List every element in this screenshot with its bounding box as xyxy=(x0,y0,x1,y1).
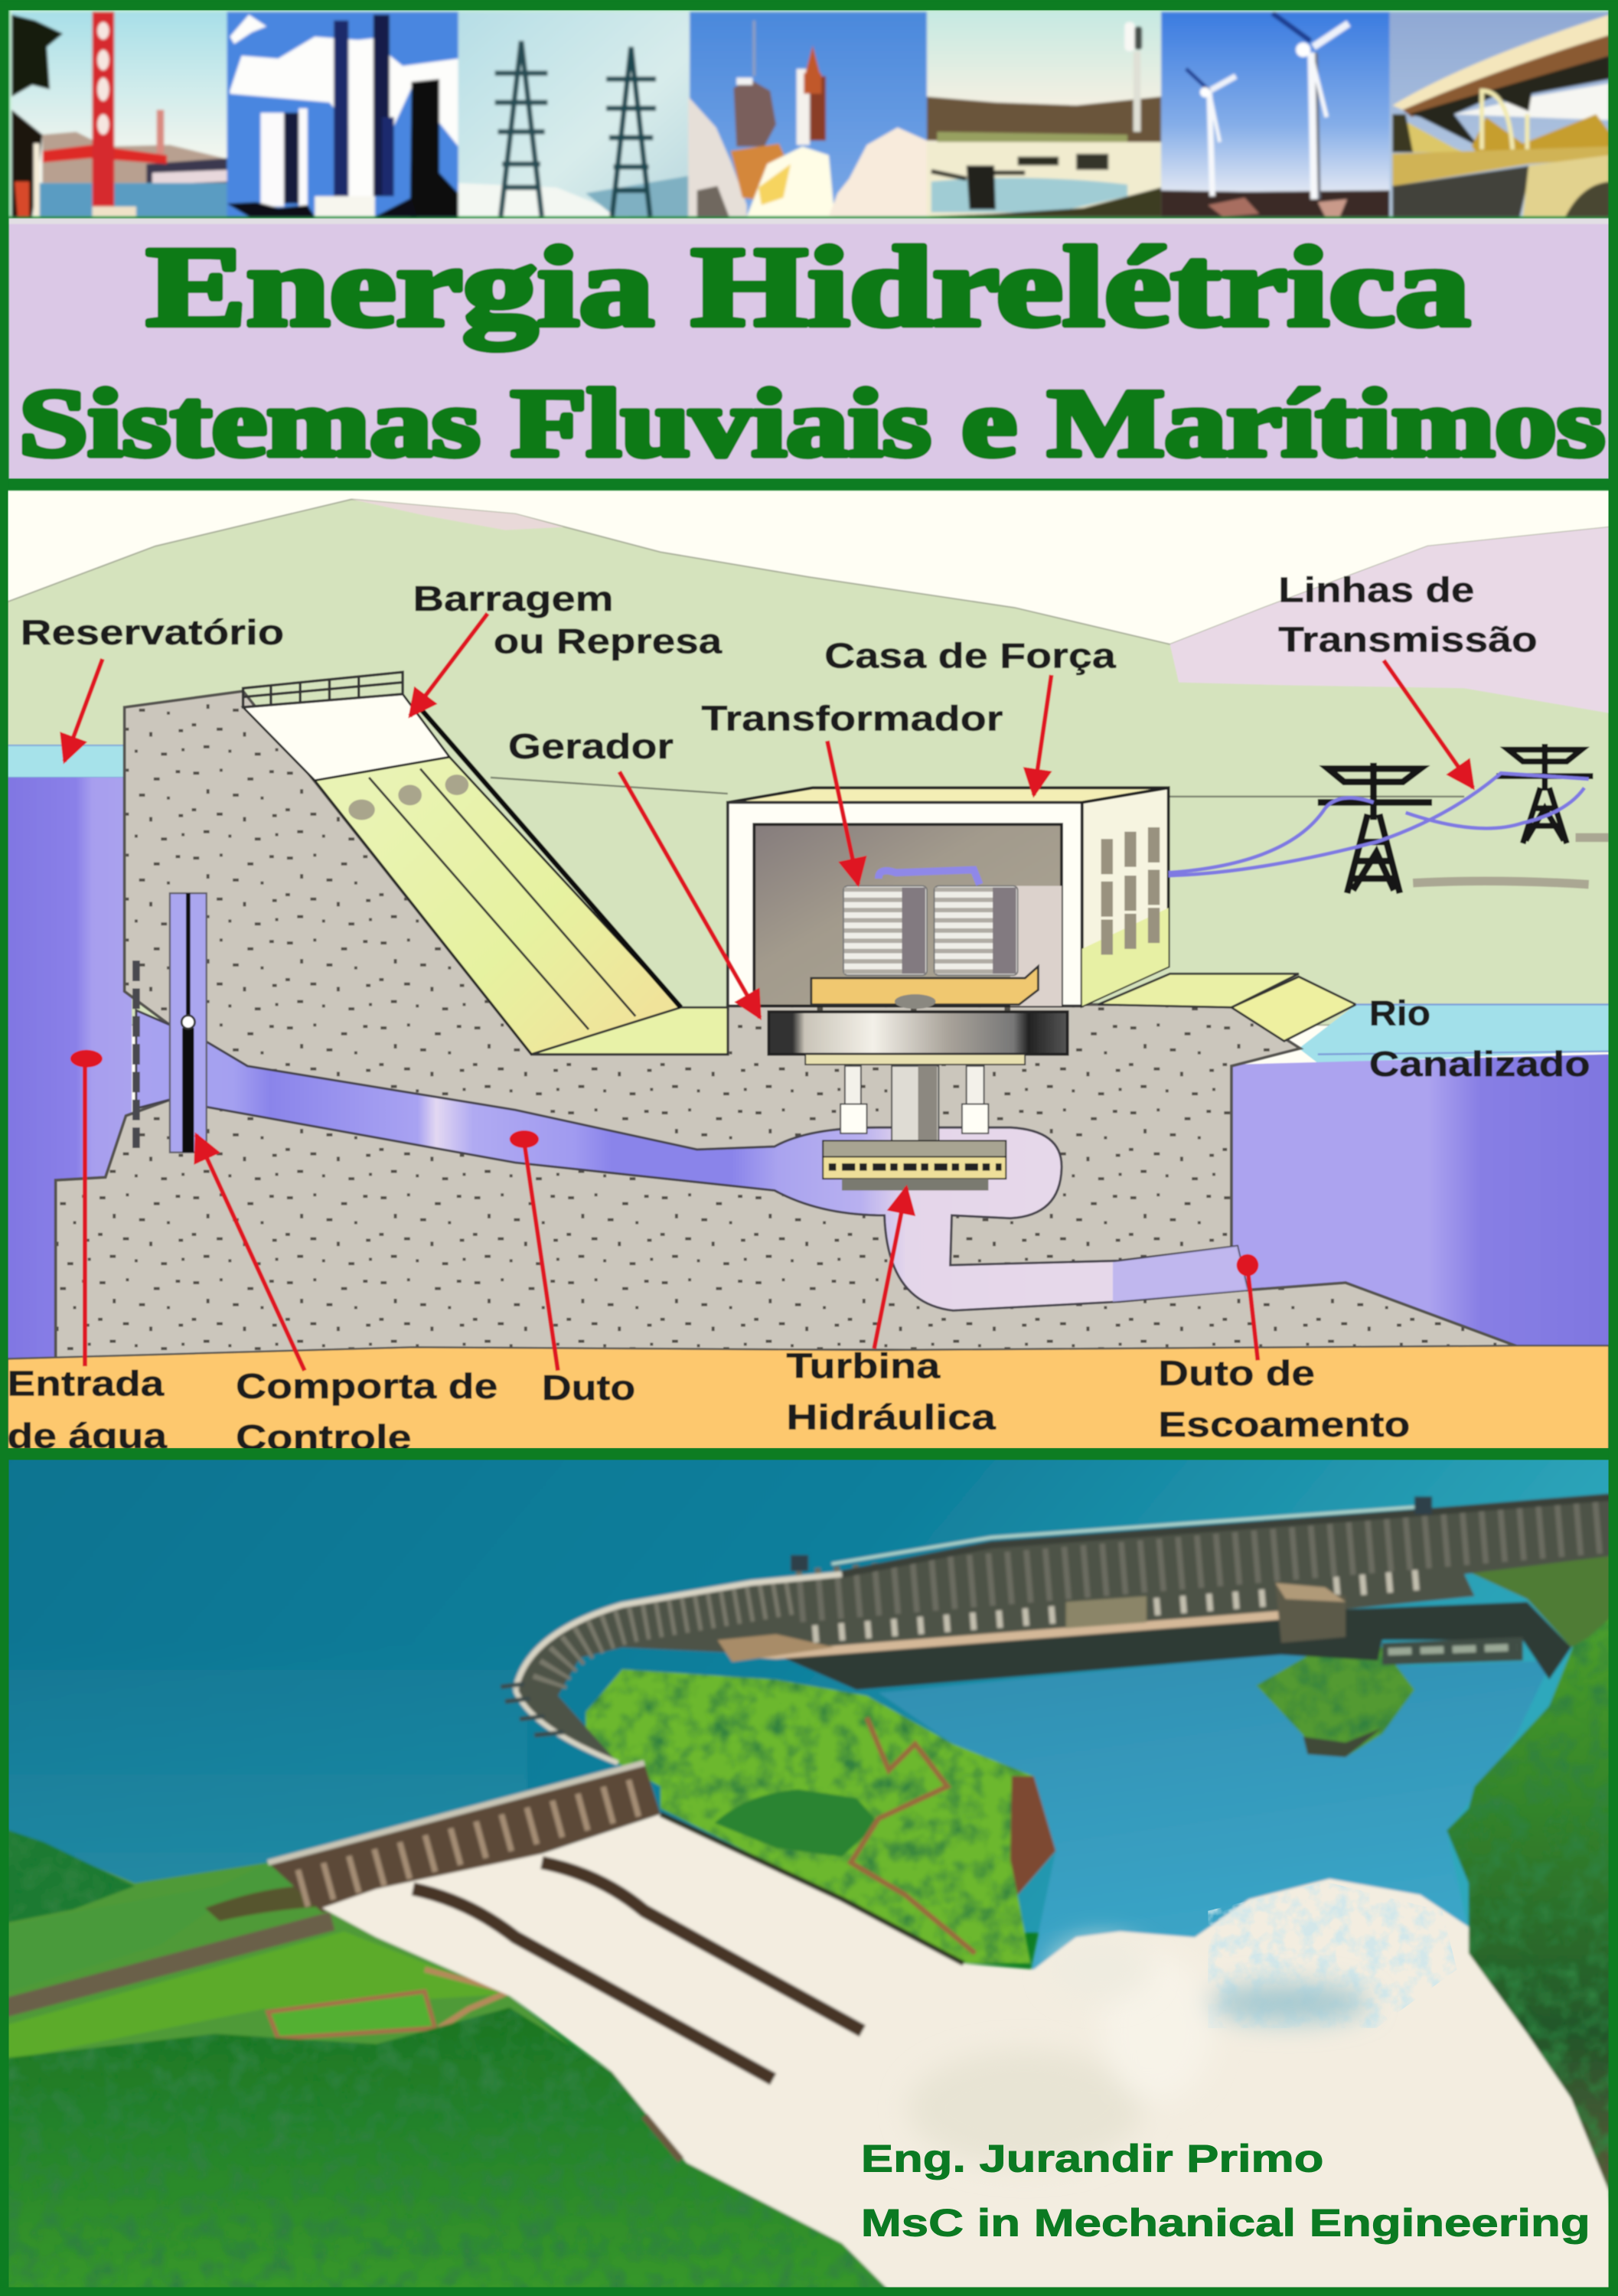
photo: skyscrapers xyxy=(227,11,458,217)
panel: aerial photo of dam xyxy=(0,1450,1618,2296)
label: Controle: Controle xyxy=(236,1417,412,1457)
stone wall xyxy=(0,1921,332,2009)
photo: rocket launch xyxy=(688,11,927,217)
label: Rio: Rio xyxy=(1369,993,1430,1032)
label: ou Represa: ou Represa xyxy=(494,621,723,660)
arrow: Comporta xyxy=(196,1135,305,1371)
shaft assembly xyxy=(840,1066,988,1142)
author name: Eng. Jurandir Primo xyxy=(861,2137,1323,2180)
spillway gates xyxy=(268,1763,661,1913)
label: Linhas de: Linhas de xyxy=(1278,569,1475,609)
title line 2: Sistemas Fluviais e Marítimos xyxy=(19,370,1605,477)
chute wall 3 xyxy=(661,1815,964,1964)
label: Hidráulica: Hidráulica xyxy=(786,1397,996,1437)
left bank base xyxy=(9,1861,569,2055)
label: Canalizado: Canalizado xyxy=(1369,1044,1590,1084)
river channel xyxy=(1299,1004,1610,1063)
main dam xyxy=(515,1496,1618,1763)
photo: wind turbines xyxy=(1161,11,1390,217)
author credential: MsC in Mechanical Engineering xyxy=(861,2202,1590,2245)
photo: highway overpass xyxy=(1390,11,1610,217)
upper right land xyxy=(1464,1546,1618,1647)
hillside: green xyxy=(8,499,1610,1025)
panel: photo strip xyxy=(8,8,1610,217)
generator unit xyxy=(768,967,1068,1065)
label: Entrada: Entrada xyxy=(8,1363,165,1403)
label: Barragem: Barragem xyxy=(413,579,614,618)
reservoir water surface xyxy=(8,745,125,778)
turbine xyxy=(823,1140,1006,1190)
right bank xyxy=(1447,1551,1618,2197)
steam plume xyxy=(1052,1940,1151,1999)
label: Duto de: Duto de xyxy=(1158,1353,1315,1393)
bridge deck xyxy=(1382,1637,1523,1665)
label: Comporta de: Comporta de xyxy=(236,1366,497,1406)
island xyxy=(1256,1637,1414,1757)
arrow: Transformador xyxy=(827,741,858,885)
tower shadow xyxy=(1413,837,1610,885)
panel: title xyxy=(8,218,1610,479)
photo: park with lamp post xyxy=(927,11,1161,217)
arrow: Duto xyxy=(510,1130,558,1371)
title line 1: Energia Hidrelétrica xyxy=(146,224,1470,351)
peninsula cliff xyxy=(1010,1776,1055,1895)
downstream pool xyxy=(879,1653,1552,1977)
diagram bottom border xyxy=(0,1448,1618,1460)
panel: hydroelectric cross-section diagram xyxy=(8,491,1610,1457)
reservoir water xyxy=(8,778,132,1359)
roadway xyxy=(732,1615,1281,1655)
upper fields xyxy=(0,1863,300,1994)
label: Reservatório: Reservatório xyxy=(21,612,284,652)
photo: suspension bridge xyxy=(11,11,227,217)
left hill xyxy=(0,1828,135,1924)
penstock duct xyxy=(136,1010,1248,1310)
peninsula dark patch xyxy=(715,1789,879,1857)
label: Escoamento: Escoamento xyxy=(1158,1404,1410,1444)
transmission towers xyxy=(1318,744,1610,893)
reservoir lake xyxy=(0,1450,1618,1933)
foam water speckle xyxy=(1208,1882,1457,2028)
hillside: pink far hill xyxy=(1170,527,1610,713)
thin horizon lines xyxy=(491,778,1464,797)
tower 1 xyxy=(1318,763,1432,893)
zigzag track xyxy=(851,1717,975,1953)
mist cloud xyxy=(908,1955,1371,2167)
peninsula xyxy=(586,1669,1055,1964)
foam and chutes xyxy=(322,1815,1618,2296)
label: Duto: Duto xyxy=(542,1368,635,1407)
tailwater xyxy=(1231,1055,1610,1345)
tailrace apron xyxy=(1098,974,1299,1007)
lower dam wall xyxy=(776,1602,1571,1690)
arrow: Duto de Escoamento xyxy=(1237,1254,1258,1360)
label: de água: de água xyxy=(8,1416,168,1456)
spillway xyxy=(243,672,728,1055)
forest edge rock xyxy=(644,2116,681,2160)
label: Turbina: Turbina xyxy=(786,1345,941,1385)
forest xyxy=(0,2007,895,2296)
hillside: pink peak xyxy=(351,499,564,530)
photo: transmission towers xyxy=(458,11,690,217)
label: Casa de Força: Casa de Força xyxy=(824,635,1116,675)
jetties xyxy=(501,1684,564,1735)
gate shaft xyxy=(170,893,207,1153)
label: Gerador: Gerador xyxy=(508,726,674,766)
arrow: Entrada de água xyxy=(70,1050,103,1366)
compound field xyxy=(268,1991,435,2038)
concrete dam body xyxy=(56,691,1515,1359)
lower field xyxy=(0,1932,505,2062)
discharge mottled blend xyxy=(1113,1246,1248,1302)
chute wall 1 xyxy=(413,1889,773,2079)
lake lighter foreground xyxy=(9,1668,528,1883)
tower 2 xyxy=(1496,744,1593,843)
label: Transmissão: Transmissão xyxy=(1278,619,1538,659)
power lines xyxy=(1169,773,1589,876)
transformers xyxy=(843,869,1018,975)
intake screen xyxy=(134,960,138,1153)
arrow: Turbina xyxy=(874,1188,906,1349)
power house xyxy=(728,788,1169,1006)
intake towers xyxy=(791,1496,1432,1571)
ground strip xyxy=(8,1345,1610,1450)
chute wall 2 xyxy=(542,1863,863,2031)
river outline xyxy=(1318,1004,1610,1055)
arrow: Reservatório xyxy=(64,659,103,762)
arrow: Gerador xyxy=(619,771,760,1018)
arrow: Casa de Força xyxy=(1034,675,1052,795)
arrow: Linhas de Transmissão xyxy=(1384,660,1473,788)
arrow: Barragem xyxy=(410,614,488,716)
label: Transformador: Transformador xyxy=(701,699,1003,739)
powerhouse block xyxy=(1275,1583,1346,1643)
